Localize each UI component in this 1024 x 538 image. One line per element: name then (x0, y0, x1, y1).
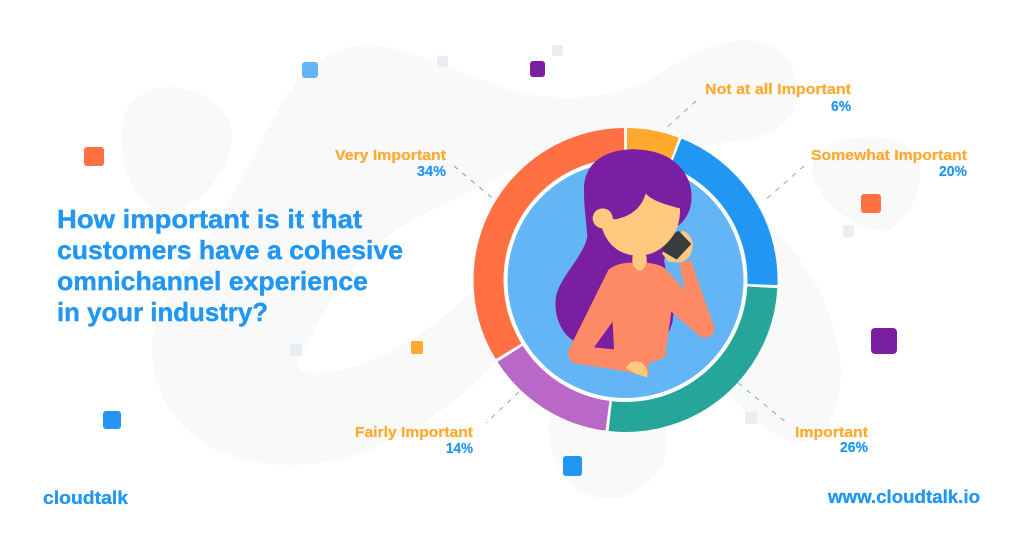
leader lines (454, 101, 804, 423)
title: How important is it that (57, 204, 362, 234)
decorative squares (84, 45, 897, 476)
label: important: 26% (840, 439, 868, 456)
website url: www.cloudtalk.io (827, 487, 980, 507)
background blobs (121, 40, 920, 499)
label: fairly important: 14% (446, 440, 473, 457)
label: fairly important: Fairly Important (355, 424, 473, 441)
label: very important (335, 147, 446, 180)
label: somewhat important (811, 147, 967, 180)
title: omnichannel experience (57, 266, 368, 296)
label: important (795, 424, 868, 456)
lower hand (626, 361, 647, 377)
donut chart (488, 143, 762, 417)
illustration: woman on the phone (555, 149, 714, 377)
label: important: Important (795, 424, 868, 441)
logo: cloudtalk: cloudtalk (43, 488, 129, 508)
title: in your industry? (57, 297, 268, 327)
hair (555, 149, 692, 350)
body (568, 260, 714, 377)
inner circle (506, 160, 745, 400)
neck (632, 252, 647, 271)
label: not at all important: Not at all Important (705, 81, 851, 98)
face (593, 193, 680, 256)
label: not at all important (705, 81, 851, 115)
label: somewhat important: Somewhat Important (811, 147, 967, 164)
label: not at all important: 6% (831, 98, 851, 115)
label: very important: Very Important (335, 147, 446, 164)
label: fairly important (355, 424, 473, 457)
label: somewhat important: 20% (939, 163, 967, 180)
arm gap (594, 322, 614, 349)
hand and phone (660, 231, 693, 263)
title: customers have a cohesive (57, 235, 403, 265)
title (57, 204, 403, 327)
label: very important: 34% (417, 163, 446, 180)
